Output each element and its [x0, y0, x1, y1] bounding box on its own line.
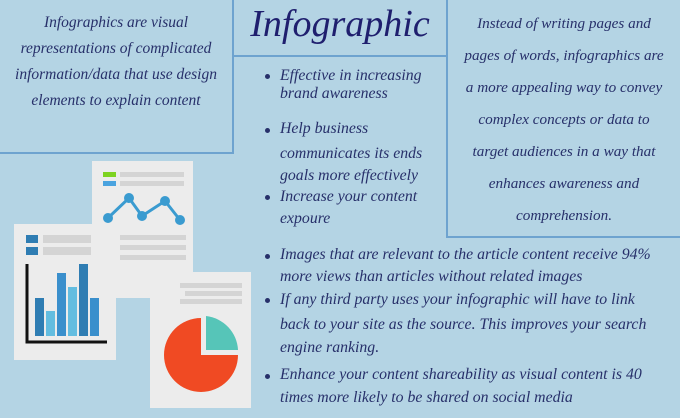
bullets: benefits: Effective in increasing: [280, 67, 422, 84]
text: description: target audiences in a way that: [473, 143, 655, 160]
bullets: benefits: brand awareness: [280, 85, 388, 102]
illustration: documents: [14, 161, 251, 408]
bullets: benefits: back to your site as the source. This improves your search: [280, 316, 646, 333]
bullets: benefits: Enhance your content shareability as visual content is 40: [280, 366, 642, 383]
text: description: enhances awareness and: [489, 175, 639, 192]
panel: right description: [446, 0, 680, 238]
bullets: benefits: goals more effectively: [280, 167, 418, 184]
doc: pie chart: [150, 272, 251, 408]
text: description: Instead of writing pages and: [477, 15, 651, 32]
bullets: benefits: Help business: [280, 120, 368, 137]
bullets: benefits: [265, 67, 651, 406]
doc: line chart: [92, 161, 193, 298]
bullets: benefits: more views than articles without related images: [280, 268, 582, 285]
text: description: complex concepts or data to: [478, 111, 650, 128]
bullets: benefits: If any third party uses your infographic will have to link: [280, 291, 635, 308]
text: description: [464, 15, 664, 224]
text: definition: Infographics are visual: [44, 14, 188, 31]
text: definition: elements to explain content: [31, 92, 201, 109]
bullets: benefits: communicates its ends: [280, 145, 422, 162]
text: definition: [15, 14, 217, 109]
bullets: benefits: expoure: [280, 210, 330, 227]
bullets: benefits: engine ranking.: [280, 339, 379, 356]
bullets: benefits: times more likely to be shared on social media: [280, 389, 573, 406]
text: definition: information/data that use design: [15, 66, 217, 83]
text: definition: representations of complicated: [21, 40, 211, 57]
doc: bar chart: [14, 224, 116, 360]
panel: left definition: [0, 0, 234, 154]
text: description: comprehension.: [516, 207, 612, 224]
text: description: pages of words, infographics are: [464, 47, 664, 64]
bullets: benefits: Images that are relevant to the article content receive 94%: [280, 246, 651, 263]
bullets: benefits: Increase your content: [280, 188, 417, 205]
panel: title: [232, 0, 448, 57]
text: description: a more appealing way to convey: [466, 79, 662, 96]
title: Infographic: [250, 3, 430, 45]
